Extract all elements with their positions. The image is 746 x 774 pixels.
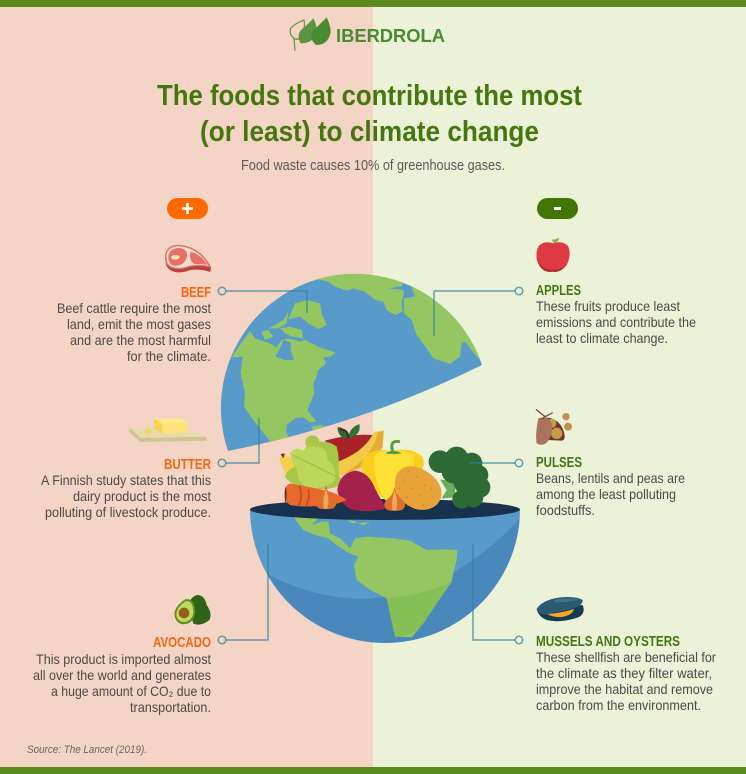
heading: avocado: AVOCADO [153,635,211,651]
heading: pulses: PULSES [536,455,582,471]
top bar [0,0,746,7]
text: mussels and oysters [536,649,716,713]
icon: mussel [537,597,584,621]
text: avocado: transportation. [130,699,211,715]
subtitle: Food waste causes 10% of greenhouse gases. [241,157,505,174]
potato [395,466,442,510]
apple [325,424,372,462]
title [157,80,582,148]
text: apples: least to climate change. [536,330,668,346]
minus badge [537,198,578,219]
logo: Iberdrola [290,17,445,51]
text: butter: A Finnish study states that this [41,472,211,488]
lettuce [285,435,342,489]
text: avocado [33,651,211,715]
icon: apple [537,238,570,272]
title: (or least) to climate change [200,116,539,148]
globe: lower half bowl [250,509,520,650]
beet [337,471,387,511]
text: apples: emissions and contribute the [536,314,696,330]
text: mussels and oysters: These shellfish are beneficial for [536,649,716,665]
onion left [316,485,336,509]
heading: beef: BEEF [181,285,211,301]
text: beef: Beef cattle require the most [57,300,211,316]
logo: Iberdrola: IBERDROLA [336,25,445,46]
text: mussels and oysters: carbon from the environment. [536,697,701,713]
text: pulses: among the least polluting [536,486,676,502]
text: butter: polluting of livestock produce. [45,504,211,520]
heading: butter: BUTTER [164,457,211,473]
text: apples [536,298,696,346]
connector: beef [218,287,307,313]
background panel: less polluting [373,0,746,774]
bottom bar [0,767,746,774]
broccoli [429,447,490,509]
text: beef: and are the most harmful [70,332,211,348]
connector: apples [434,287,523,336]
text: avocado: a huge amount of CO₂ due to [51,683,211,699]
text: beef: for the climate. [127,348,211,364]
icon: butter [129,418,207,442]
plus badge [167,198,208,219]
heading: apples: APPLES [536,283,581,299]
connector: butter [218,418,259,467]
text: pulses: foodstuffs. [536,502,595,518]
text: butter: dairy product is the most [73,488,211,504]
background panel: more polluting [0,0,373,774]
onion right [384,487,405,511]
text: pulses: Beans, lentils and peas are [536,470,685,486]
text: apples: These fruits produce least [536,298,680,314]
connector: pulses [469,459,523,467]
carrot [285,483,347,506]
text: mussels and oysters: the climate as they filter water, [536,665,712,681]
connector: mussels [473,544,523,644]
banana [279,431,384,476]
text: mussels and oysters: improve the habitat and remove [536,681,713,697]
text: avocado: all over the world and generates [33,667,211,683]
icon: beef steak [165,245,211,272]
source note: Source: The Lancet (2019). [27,744,147,756]
food pile [279,424,490,511]
text: avocado: This product is imported almost [36,651,211,667]
text: beef [57,300,211,364]
globe: upper half [221,270,487,451]
text: beef: land, emit the most gases [67,316,211,332]
bowl rim [250,499,520,520]
heading: mussels and oysters: MUSSELS AND OYSTERS [536,634,680,650]
icon: pulses [536,409,572,445]
text: butter [41,472,211,520]
text: pulses [536,470,685,518]
connector: avocado [218,544,268,644]
yellow pepper [362,441,424,501]
icon: avocado [174,595,211,625]
title: The foods that contribute the most [157,80,582,112]
